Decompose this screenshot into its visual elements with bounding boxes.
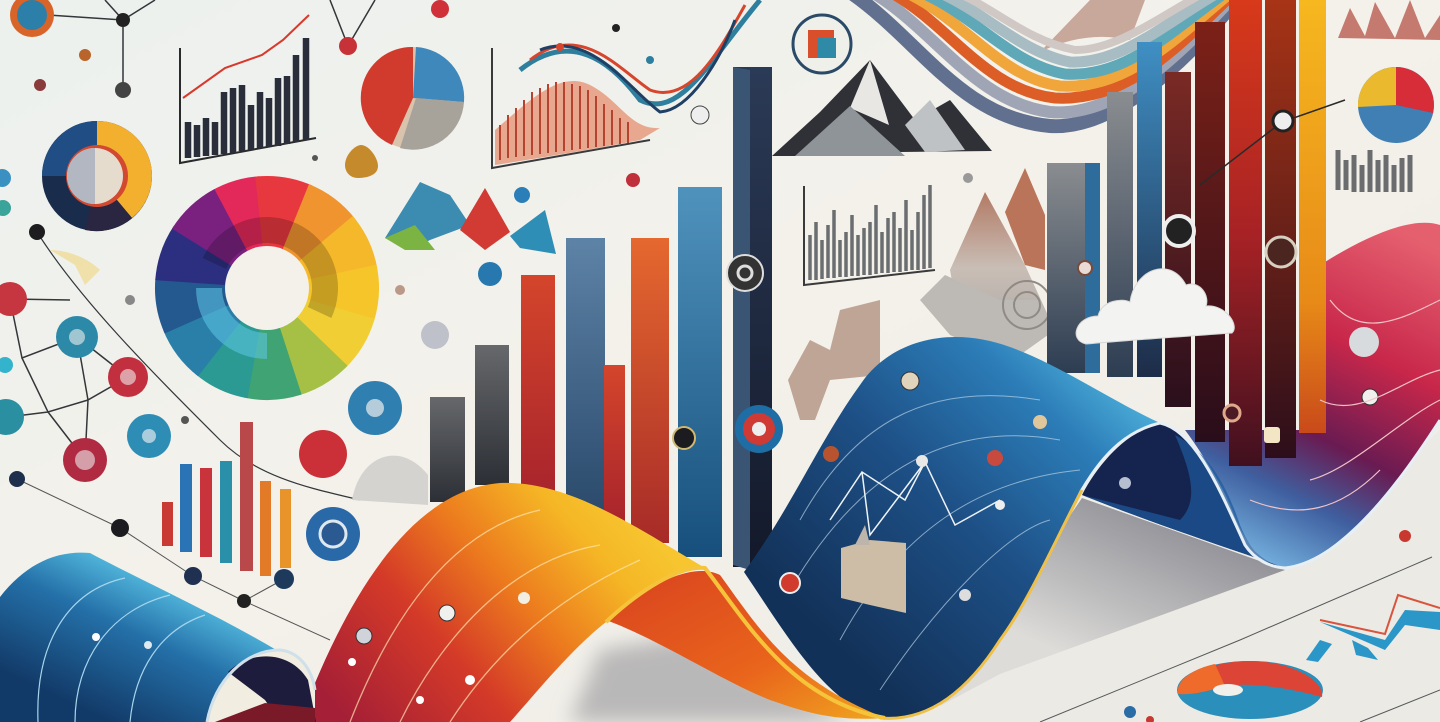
big red wave at right (1185, 223, 1440, 568)
right tall bars (1047, 0, 1345, 466)
top left corner nodes (10, 0, 449, 178)
top right mini chart (1338, 0, 1440, 40)
ridge colorful origami (385, 173, 640, 286)
donut chart left (42, 121, 152, 231)
bottom right mini line chart (1306, 595, 1440, 662)
top center wave chart (492, 0, 760, 168)
mountain illustration (772, 60, 992, 156)
front blue ribbon (0, 553, 316, 722)
faint sketch fragment (352, 300, 880, 505)
blue curling ribbon (744, 337, 1440, 718)
scattered small dots (9, 155, 1411, 722)
line bar chart center (804, 185, 935, 285)
rock shapes (920, 168, 1055, 362)
red wave details (1250, 300, 1440, 510)
top left bar chart (180, 15, 316, 163)
pie chart top (361, 47, 464, 150)
small bar chart lower left (162, 422, 291, 576)
network graph left (0, 169, 402, 561)
right top pie chart (1358, 67, 1434, 143)
center bars (430, 67, 783, 570)
yellow and red ribbon (315, 483, 885, 722)
top badge circle icon (793, 15, 851, 73)
right small bar chart (1338, 150, 1410, 192)
bottom right pie chart (1177, 661, 1323, 719)
floor with cast shadows (570, 430, 1440, 722)
top rainbow wave (850, 0, 1240, 126)
icon: cloud (1076, 269, 1234, 344)
color wheel (142, 164, 389, 412)
top mountain behind wave (1040, 0, 1145, 52)
